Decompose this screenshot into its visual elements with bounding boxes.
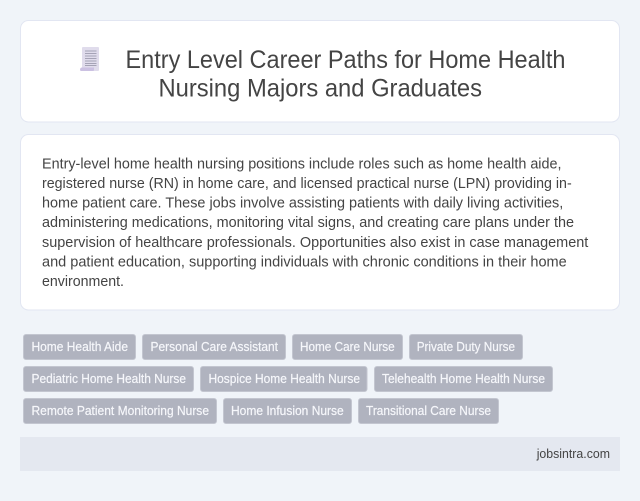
tag: Pediatric Home Health Nurse: Pediatric Home Health Nurse (32, 372, 186, 386)
icon: document scroll (80, 47, 99, 71)
tag: Private Duty Nurse (410, 334, 522, 360)
heading (126, 46, 566, 102)
tag list (24, 334, 552, 424)
text block: description: Entry-level home health nursing positions include roles such as home health aide, (42, 156, 562, 172)
tag: Remote Patient Monitoring Nurse (24, 398, 216, 424)
text block: description: home patient care. These jobs involve assisting patients with daily living activities, (42, 196, 563, 212)
text block: description (42, 156, 588, 290)
tag: Telehealth Home Health Nurse: Telehealth Home Health Nurse (382, 372, 545, 386)
tag: Transitional Care Nurse: Transitional Care Nurse (366, 404, 491, 418)
tag: Home Infusion Nurse (224, 398, 352, 424)
tag: Hospice Home Health Nurse: Hospice Home Health Nurse (208, 372, 360, 386)
text block: description: supervision of healthcare professionals. Opportunities also exist in case management (42, 235, 588, 251)
tag: Home Infusion Nurse: Home Infusion Nurse (231, 404, 344, 418)
panel: description (20, 134, 620, 310)
text block: description: and patient education, supporting individuals with chronic conditions in their home (42, 254, 567, 270)
footer (20, 437, 620, 471)
tag: Personal Care Assistant (142, 334, 286, 360)
text block: description: environment. (42, 274, 124, 290)
tag: Home Care Nurse (292, 334, 402, 360)
text block: description: registered nurse (RN) in home care, and licensed practical nurse (LPN) providing in- (42, 176, 572, 192)
tag: Pediatric Home Health Nurse (24, 366, 194, 392)
tag: Home Health Aide: Home Health Aide (32, 340, 128, 354)
heading: Nursing Majors and Graduates (158, 74, 482, 102)
footer source text: jobsintra.com (536, 447, 610, 461)
tag: Remote Patient Monitoring Nurse: Remote Patient Monitoring Nurse (32, 404, 209, 418)
tag: Home Care Nurse: Home Care Nurse (300, 340, 395, 354)
tag: Telehealth Home Health Nurse (374, 366, 552, 392)
heading: Entry Level Career Paths for Home Health (126, 46, 566, 74)
text block: description: administering medications, monitoring vital signs, and creating care plans under the (42, 215, 574, 231)
panel: title card (20, 20, 620, 122)
tag: Private Duty Nurse: Private Duty Nurse (417, 340, 515, 354)
tag: Hospice Home Health Nurse (200, 366, 367, 392)
tag: Transitional Care Nurse (358, 398, 498, 424)
tag: Home Health Aide (24, 334, 136, 360)
tag: Personal Care Assistant: Personal Care Assistant (150, 340, 278, 354)
